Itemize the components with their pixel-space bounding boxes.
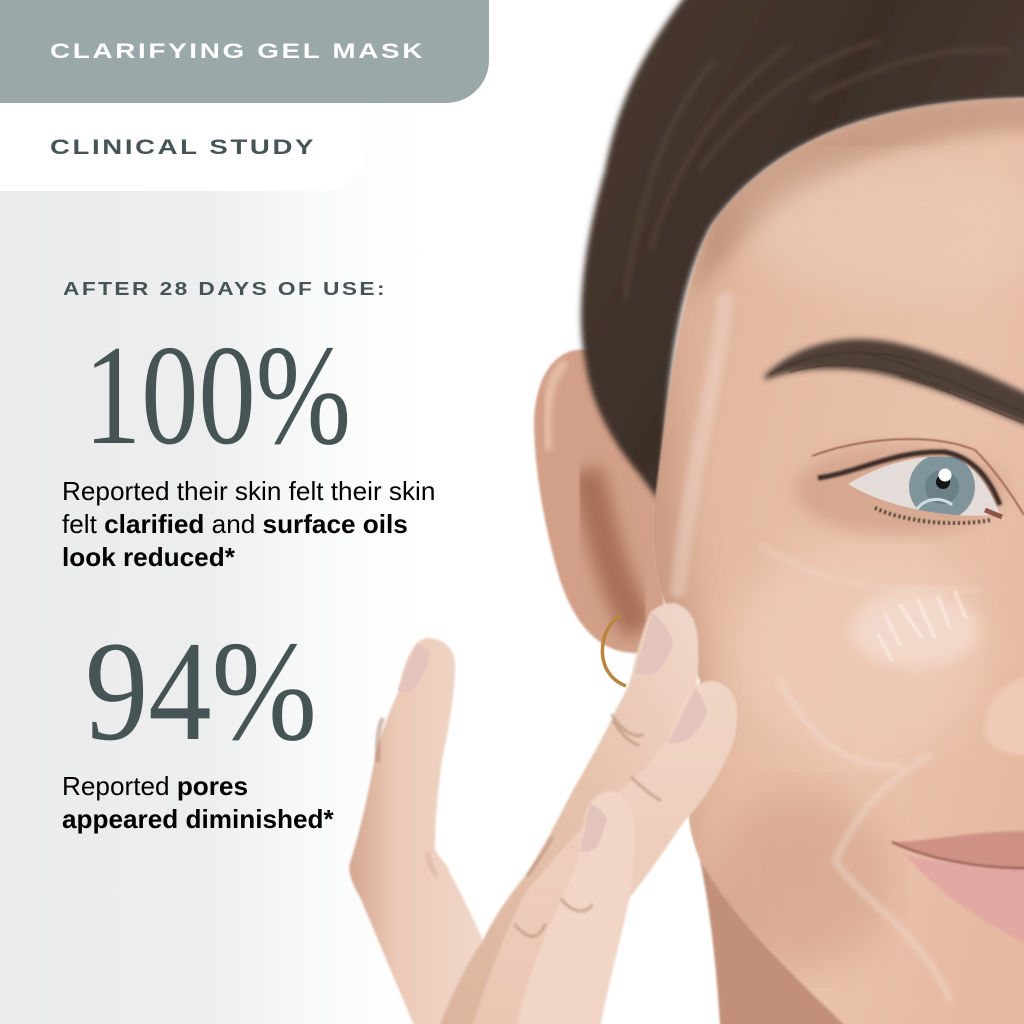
photo: woman applying gel mask <box>349 0 1024 1024</box>
knuckle shadows <box>378 715 660 937</box>
statistic: 94% <box>62 612 334 834</box>
middle finger <box>468 681 737 1024</box>
index finger <box>514 791 635 1024</box>
lower lashes <box>875 508 990 523</box>
nose <box>984 676 1024 756</box>
subheading: AFTER 28 DAYS OF USE: <box>63 278 387 299</box>
ear <box>534 349 665 653</box>
statistic: 94%: 94% <box>85 612 317 770</box>
statistic: 100%: 100% <box>84 316 351 474</box>
hand <box>349 603 737 1024</box>
gel mask streaks <box>678 300 980 1000</box>
earring <box>602 616 626 686</box>
eyelid crease <box>812 439 1024 515</box>
face shading <box>640 92 1024 1000</box>
catchlight <box>938 468 952 482</box>
eye socket shadow <box>795 445 1005 535</box>
ring finger <box>434 603 698 1024</box>
description: 100%: Reported their skin felt their skin <box>62 476 435 506</box>
lips <box>892 831 1024 950</box>
hair <box>581 0 1024 505</box>
thumb <box>349 638 483 1024</box>
header tab: clinical study: CLINICAL STUDY <box>50 136 316 159</box>
header tab: product name: CLARIFYING GEL MASK <box>50 40 425 63</box>
face skin <box>654 98 1024 1024</box>
header tab: clinical study <box>0 90 366 191</box>
statistic: 100% <box>62 316 443 572</box>
eyebrow <box>765 339 1024 440</box>
description: 94%: appeared diminished* <box>62 804 334 834</box>
upper lash line <box>818 452 1000 505</box>
description: 94%: Reported pores <box>62 771 248 801</box>
eye <box>812 439 1024 523</box>
description: 100%: look reduced* <box>62 542 236 572</box>
fingernails <box>398 613 707 852</box>
gel patch on cheek <box>850 592 980 668</box>
description: 100%: felt clarified and surface oils <box>62 509 408 539</box>
hair highlights <box>625 40 1010 300</box>
neck <box>700 860 900 1024</box>
header tab: product name <box>0 0 489 103</box>
